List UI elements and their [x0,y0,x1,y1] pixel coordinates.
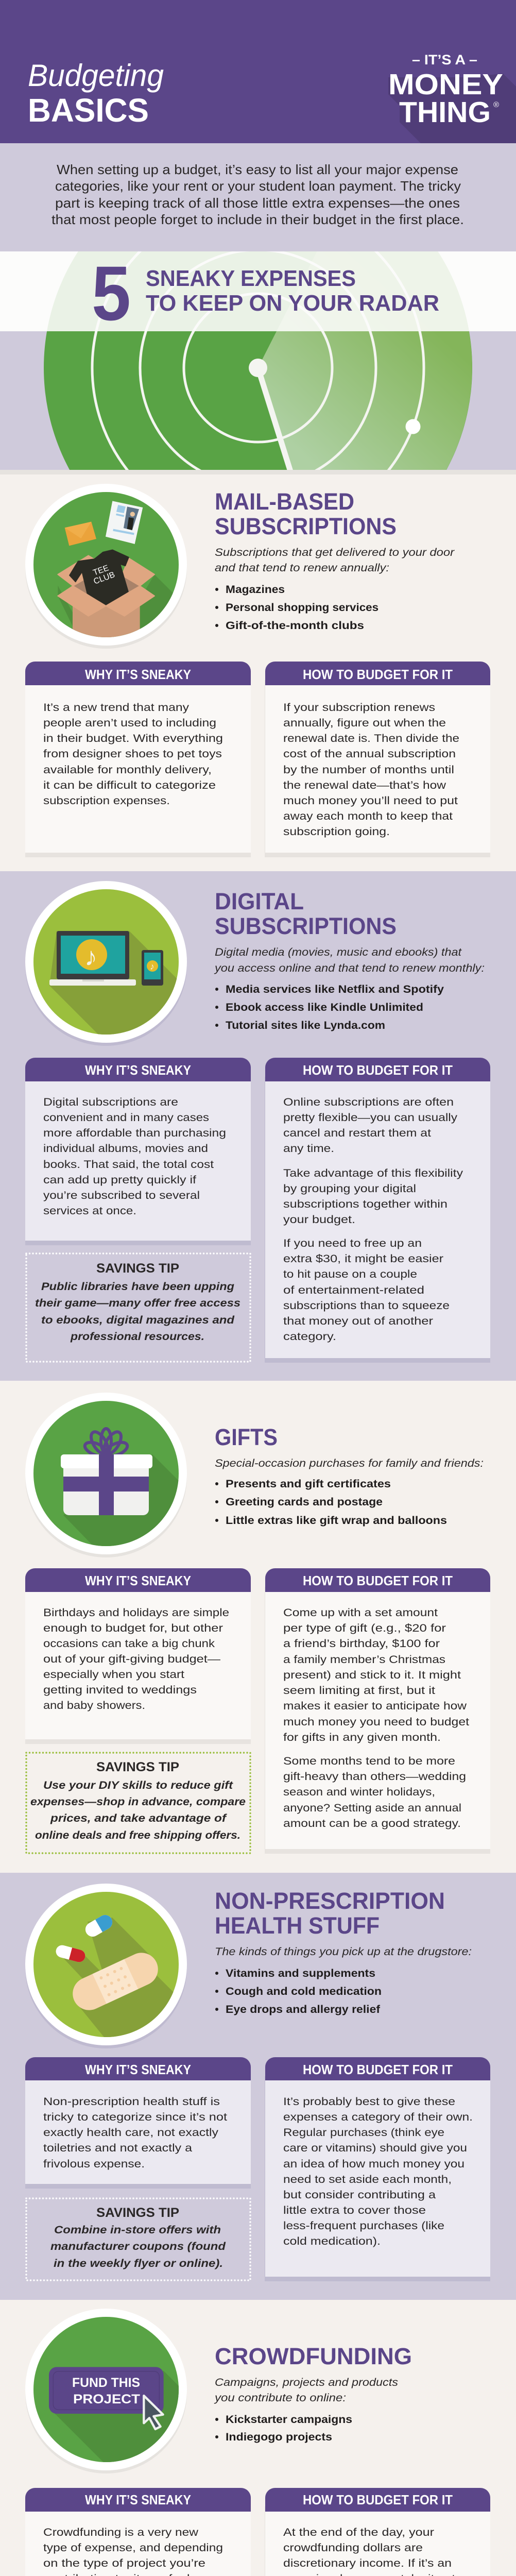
bullet list: Magazines [226,584,285,596]
panel: why it's sneaky: frivolous expense. [43,2158,145,2170]
panel: why it's sneaky: enough to budget for, but other [43,1622,223,1634]
panel: why it's sneaky: occasions can take a big chunk [43,1638,215,1650]
panel: why it's sneaky: more affordable than purchasing [43,1127,226,1139]
panel: how to budget for it: makes it easier to anticipate how [283,1700,467,1712]
callout: savings tip [26,1253,250,1362]
panel: why it's sneaky: available for monthly delivery, [43,764,212,776]
heading: SUBSCRIPTIONS [215,913,397,939]
panel: how to budget for it: HOW TO BUDGET FOR IT [303,2492,453,2507]
panel: why it's sneaky: can add up pretty quickly if [43,1174,196,1186]
callout: savings tip: professional resources. [70,1331,204,1343]
panel: how to budget for it: HOW TO BUDGET FOR IT [303,1573,453,1588]
description: Subscriptions that get delivered to your door [215,547,455,558]
description: Digital media (movies, music and ebooks) that [215,946,462,958]
panel: how to budget for it: by grouping your digital [283,1183,416,1195]
intro text: that most people forget to include in their budget in the first place. [51,212,464,227]
panel: how to budget for it: HOW TO BUDGET FOR IT [303,1062,453,1078]
panel: how to budget for it: an idea of how much money you [283,2158,465,2170]
panel: how to budget for it: subscription going. [283,826,390,838]
panel: how to budget for it: anyone? Setting aside an annual [283,1802,461,1814]
panel: how to budget for it: to hit pause on a couple [283,1268,417,1280]
panel: how to budget for it: HOW TO BUDGET FOR IT [303,667,453,682]
logo: It's a Money Thing: THING [399,96,491,129]
callout: savings tip: online deals and free shipping offers. [35,1829,240,1841]
heading: MAIL-BASED [215,488,354,515]
panel: how to budget for it: for gifts in any given month. [283,1732,441,1743]
icon: fund this project button with cursor [25,2309,187,2475]
headline text: TO KEEP ON YOUR RADAR [146,291,439,316]
description: you access online and that tend to renew monthly: [214,962,485,974]
panel: how to budget for it: category. [283,1331,336,1343]
panel: how to budget for it: of entertainment-related [283,1284,424,1296]
panel: why it's sneaky: you’re subscribed to several [43,1190,200,1201]
panel: how to budget for it: seem limiting at first, but it [283,1685,435,1697]
panel: how to budget for it: that money out of another [283,1315,433,1327]
panel: why it's sneaky: from designer shoes to pet toys [43,748,222,760]
callout: savings tip: SAVINGS TIP [96,1760,179,1774]
panel: why it's sneaky: toiletries and not exactly a [43,2142,192,2154]
description [214,946,485,974]
panel: how to budget for it: crowdfunding dollars are [283,2542,423,2554]
callout: savings tip: expenses—shop in advance, compare [30,1796,246,1808]
panel: how to budget for it: the renewal date—that’s how [283,779,446,791]
icon: box with tee shirt, envelope and magazine: CLUB [93,570,116,586]
panel: how to budget for it: HOW TO BUDGET FOR IT [303,2062,453,2077]
title: Budgeting Basics [28,58,164,129]
bullet list: Kickstarter campaigns [226,2414,352,2426]
description: Special-occasion purchases for family and friends: [215,1458,484,1469]
panel: why it's sneaky: WHY IT’S SNEAKY [85,1062,191,1078]
heading: SUBSCRIPTIONS [215,513,397,539]
panel: why it's sneaky: books. That said, the total cost [43,1159,214,1171]
panel: why it's sneaky: Digital subscriptions are [43,1096,178,1108]
heading: NON-PRESCRIPTION [215,1888,445,1914]
panel: how to budget for it: Online subscriptions are often [283,1096,454,1108]
callout: savings tip: SAVINGS TIP [96,1261,179,1276]
panel: how to budget for it [265,2488,490,2576]
intro band [0,143,516,470]
callout: savings tip: manufacturer coupons (found [50,2241,226,2252]
panel: why it's sneaky: Birthdays and holidays are simple [43,1607,229,1619]
icon: box with tee shirt, envelope and magazine [25,484,187,651]
callout: savings tip: SAVINGS TIP [96,2206,179,2220]
panel: how to budget for it: cold medication). [283,2235,381,2247]
heading: CROWDFUNDING [215,2343,412,2369]
callout: savings tip: Use your DIY skills to reduce gift [43,1780,233,1791]
callout: savings tip: Combine in-store offers with [54,2224,221,2236]
panel: how to budget for it: away each month to keep that [283,810,453,822]
callout: savings tip: Public libraries have been upping [41,1281,234,1293]
heading: HEALTH STUFF [215,1912,380,1939]
panel: how to budget for it: extra $30, it might be easier [283,1253,443,1265]
bullet list: Tutorial sites like Lynda.com [226,1020,385,1031]
description [215,547,455,574]
panel: how to budget for it: much money you need to budget [283,1716,469,1728]
panel: how to budget for it: cost of the annual subscription [283,748,456,760]
description: and that tend to renew annually: [215,562,389,574]
title: Budgeting Basics: BASICS [28,92,149,129]
panel: why it's sneaky: exactly health care, not exactly [43,2127,219,2139]
bullet list [215,1478,447,1527]
panel: how to budget for it: your budget. [283,1214,355,1226]
panel: why it's sneaky: Crowdfunding is a very new [43,2527,199,2538]
section: gifts [25,1393,490,1854]
panel: how to budget for it: It’s probably best to give these [283,2096,455,2108]
radar graphic with headline band [0,251,516,470]
panel: why it's sneaky [25,662,251,857]
icon: wrapped gift box [25,1393,187,1557]
bullet list: Personal shopping services [226,602,379,614]
bullet list [215,1968,382,2015]
panel: how to budget for it: Some months tend to be more [283,1755,455,1767]
panel: why it's sneaky: in their budget. With everything [43,733,223,744]
intro text: When setting up a budget, it’s easy to list all your major expense [57,162,458,177]
panel: how to budget for it [265,662,490,857]
icon: box with tee shirt, envelope and magazine: TEE [92,564,110,578]
panel: how to budget for it: need to set aside each month, [283,2174,452,2185]
bullet list: Indiegogo projects [226,2431,332,2443]
callout: savings tip [26,2198,250,2280]
bullet list: Eye drops and allergy relief [226,2004,381,2015]
panel: why it's sneaky: out of your gift-giving budget— [43,1653,220,1665]
panel: how to budget for it: any time. [283,1143,334,1155]
panel: how to budget for it: a family member’s Christmas [283,1654,445,1666]
panel: why it's sneaky: people aren’t used to including [43,717,216,729]
description: you contribute to online: [214,2392,346,2404]
panel: how to budget for it: season and winter holidays, [283,1786,435,1798]
section: mail-based subscriptions [0,470,516,871]
heading [215,488,397,539]
logo: It's a Money Thing: – IT’S A – [412,52,477,67]
panel: why it's sneaky [25,2057,251,2189]
panel: how to budget for it: by the number of months until [283,764,454,776]
bullet list: Greeting cards and postage [226,1496,383,1508]
section: digital subscriptions [0,871,516,1381]
panel: why it's sneaky: It’s a new trend that many [43,702,190,714]
bullet list: Presents and gift certificates [226,1478,391,1490]
panel: how to budget for it: Take advantage of this flexibility [283,1167,463,1179]
section: crowdfunding [25,2309,490,2576]
title: Budgeting Basics: Budgeting [28,58,164,93]
icon: laptop and phone playing music: ♪ [150,961,154,972]
panel: why it's sneaky: convenient and in many cases [43,1112,209,1124]
logo: It's a Money Thing: ® [493,100,499,109]
panel: why it's sneaky [25,2488,251,2576]
panel: how to budget for it: Regular purchases (think eye [283,2127,444,2139]
headline text [146,266,439,316]
callout: savings tip: their game—many offer free access [35,1297,240,1309]
heading [215,888,397,939]
callout: savings tip [26,1753,250,1853]
heading: GIFTS [215,1424,278,1450]
panel: why it's sneaky: WHY IT’S SNEAKY [85,2062,191,2077]
panel: how to budget for it: present) and stick to it. It might [283,1669,461,1681]
panel: how to budget for it [265,2057,490,2281]
header banner [0,0,516,143]
panel: how to budget for it [265,1568,490,1854]
logo: It's a Money Thing: MONEY [388,68,503,101]
panel: how to budget for it: cancel and restart them at [283,1127,431,1139]
panel: how to budget for it: less-frequent purchases (like [283,2220,444,2232]
panel: why it's sneaky: WHY IT’S SNEAKY [85,667,191,682]
headline text: SNEAKY EXPENSES [146,266,356,291]
panel: why it's sneaky: tricky to categorize since it’s not [43,2111,227,2123]
panel: how to budget for it: subscriptions together within [283,1198,448,1210]
logo: It's a Money Thing [388,52,516,143]
panel: why it's sneaky [25,1568,251,1744]
panel: how to budget for it: but consider contributing a [283,2189,436,2201]
bullet list: Cough and cold medication [226,1986,382,1997]
panel: why it's sneaky [25,1058,251,1245]
description [214,2377,399,2404]
panel: how to budget for it: pretty flexible—you can usually [283,1112,458,1124]
icon: bandage and pills [25,1884,187,2048]
panel: why it's sneaky: on the type of project you’re [43,2557,205,2569]
bullet list: Gift-of-the-month clubs [226,620,364,632]
panel: how to budget for it: much money you’ll need to put [283,795,458,807]
bullet list: Ebook access like Kindle Unlimited [226,1002,423,1013]
panel: how to budget for it: renewal date is. Then divide the [283,733,459,744]
panel: how to budget for it: At the end of the day, your [283,2527,434,2538]
section: non-prescription health stuff [0,1873,516,2300]
heading [215,1888,445,1939]
bullet list: Little extras like gift wrap and balloons [226,1515,447,1527]
bullet list [215,984,444,1031]
panel: why it's sneaky: getting invited to weddings [43,1684,197,1696]
panel: why it's sneaky: especially when you start [43,1669,184,1681]
panel: how to budget for it: discretionary income. If it’s an [283,2557,452,2569]
panel: why it's sneaky: services at once. [43,1205,136,1217]
heading: DIGITAL [215,888,304,914]
bullet list: Media services like Netflix and Spotify [226,984,444,995]
panel: why it's sneaky: individual albums, movies and [43,1143,208,1155]
panel: how to budget for it: annually, figure out when the [283,717,446,729]
panel: why it's sneaky: type of expense, and depending [43,2542,223,2554]
panel: how to budget for it: If your subscription renews [283,702,435,714]
panel: how to budget for it: little extra to cover those [283,2205,426,2216]
icon: laptop and phone playing music: ♪ [84,942,97,971]
description: The kinds of things you pick up at the drugstore: [215,1946,472,1958]
panel: why it's sneaky: Non-prescription health stuff is [43,2096,220,2108]
bullet list [215,584,379,632]
callout: savings tip: to ebooks, digital magazines and [41,1314,235,1326]
intro text [51,162,464,227]
description: Campaigns, projects and products [215,2377,399,2388]
intro text: part is keeping track of all those little extra expenses—the ones [55,195,460,211]
panel: how to budget for it [265,1058,490,1363]
panel: how to budget for it: per type of gift (e.g., $20 for [283,1622,446,1634]
callout: savings tip: in the weekly flyer or online). [54,2258,223,2269]
panel: why it's sneaky: it can be difficult to categorize [43,779,216,791]
callout: savings tip: prices, and take advantage of [50,1812,227,1824]
panel: how to budget for it: Come up with a set amount [283,1607,438,1619]
radar: green disc, sweep, rings and blips [44,251,472,470]
icon: fund this project button with cursor: PROJECT [73,2392,140,2406]
panel: why it's sneaky: WHY IT’S SNEAKY [85,1573,191,1588]
panel: how to budget for it: If you need to free up an [283,1238,422,1249]
icon: fund this project button with cursor: FUND THIS [72,2376,140,2390]
panel: how to budget for it: expenses a category of their own. [283,2111,473,2123]
panel: why it's sneaky: WHY IT’S SNEAKY [85,2492,191,2507]
headline number 5: 5 [92,250,131,336]
panel: why it's sneaky: and baby showers. [43,1700,145,1711]
panel: how to budget for it: subscriptions than to squeeze [283,1300,450,1312]
panel: how to budget for it: amount can be a good strategy. [283,1818,461,1829]
bullet list: Vitamins and supplements [226,1968,375,1979]
bullet list [215,2414,352,2443]
panel: how to budget for it: a friend’s birthday, $100 for [283,1638,440,1650]
icon: laptop and phone playing music [25,881,187,1046]
panel: how to budget for it: gift-heavy than others—wedding [283,1771,466,1783]
panel: how to budget for it: care or vitamins) should give you [283,2142,467,2154]
panel: why it's sneaky: subscription expenses. [43,795,170,807]
intro text: categories, like your rent or your student loan payment. The tricky [55,178,461,194]
